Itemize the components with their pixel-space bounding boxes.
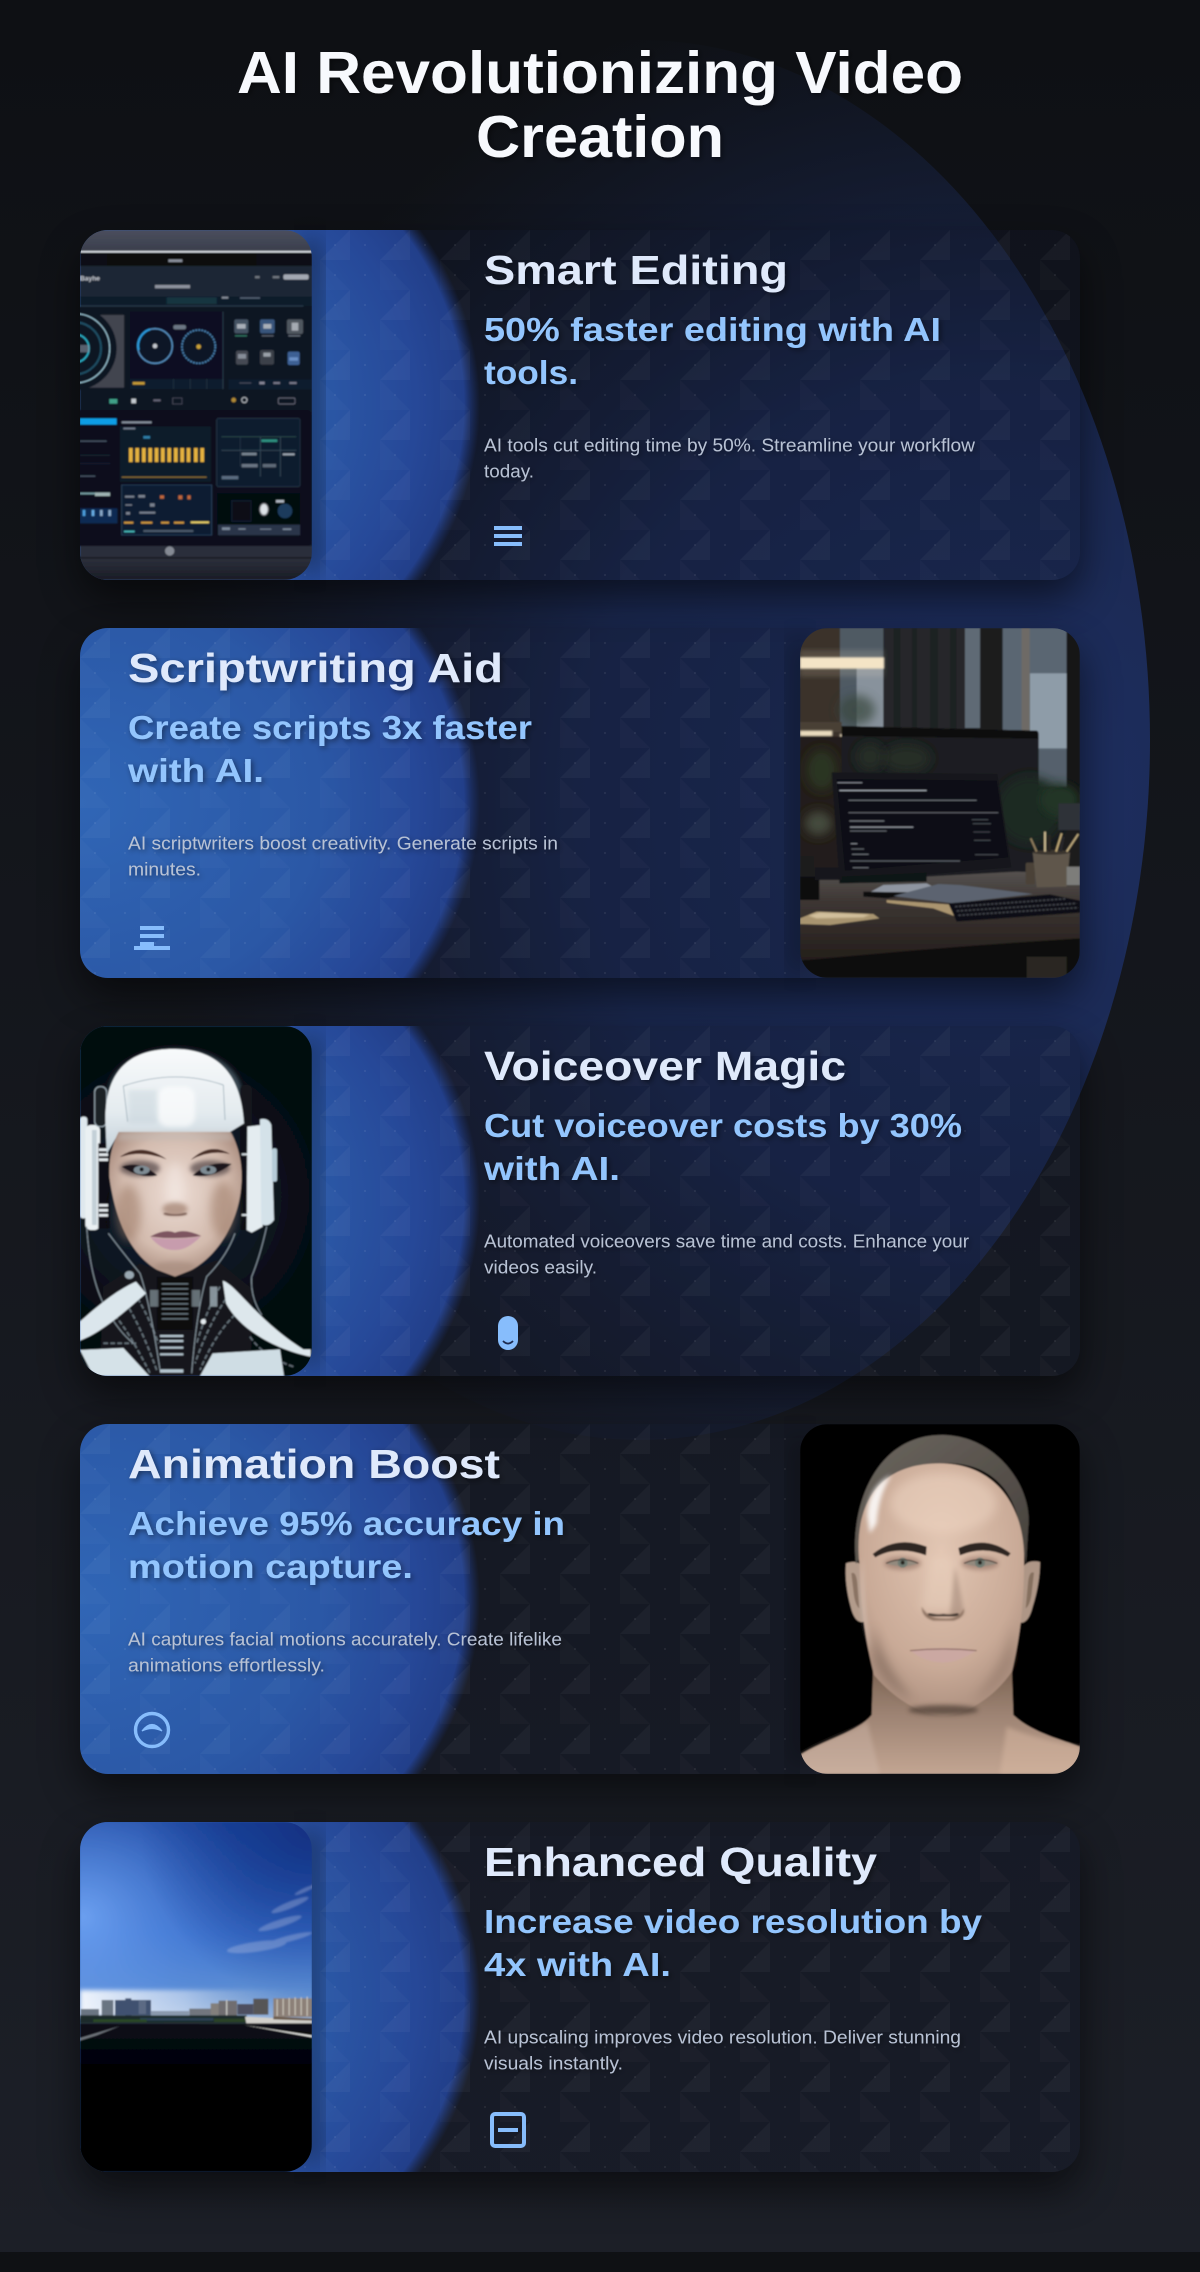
panel: Animation Boost	[80, 1424, 1080, 1792]
image: city skyline under blue sky	[80, 1822, 316, 2172]
icon: circled chevron	[136, 1714, 168, 1746]
description: videos easily.	[484, 1258, 597, 1278]
description	[484, 2028, 961, 2074]
description: AI upscaling improves video resolution. Deliver stunning	[484, 2028, 961, 2048]
panel: Scriptwriting Aid	[80, 628, 1080, 996]
description: visuals instantly.	[484, 2054, 623, 2074]
heading: Voiceover Magic	[484, 1043, 846, 1089]
stat subheading: with AI.	[127, 752, 264, 789]
title	[237, 40, 963, 170]
heading: Enhanced Quality	[484, 1839, 877, 1885]
panel: Enhanced Quality	[80, 1822, 1080, 2190]
icon: script lines	[134, 926, 170, 950]
stat subheading	[484, 311, 941, 391]
stat subheading	[484, 1903, 983, 1983]
stat subheading	[127, 709, 532, 789]
image: robot woman with headphones	[80, 1026, 312, 1376]
panel: Smart Editing	[33, 230, 1080, 598]
stat subheading	[128, 1505, 565, 1585]
image: dashboard monitor	[80, 230, 312, 580]
icon: boxed minus	[492, 2114, 524, 2146]
title: Creation	[476, 104, 724, 170]
stat subheading: Increase video resolution by	[484, 1903, 983, 1940]
stat subheading: tools.	[484, 354, 578, 391]
stat subheading: Cut voiceover costs by 30%	[484, 1107, 962, 1144]
description	[128, 1630, 562, 1676]
stat subheading: Create scripts 3x faster	[128, 709, 532, 746]
title: AI Revolutionizing Video	[237, 40, 963, 106]
heading: Animation Boost	[128, 1441, 500, 1487]
heading: Smart Editing	[484, 247, 788, 293]
background blue ellipse	[130, 40, 1150, 1440]
description: minutes.	[128, 860, 201, 880]
description	[128, 834, 558, 880]
image: dashboard monitor: Bayhe	[80, 276, 100, 283]
description: AI captures facial motions accurately. Create lifelike	[128, 1630, 562, 1650]
icon: hamburger lines	[494, 526, 522, 546]
description: today.	[484, 462, 534, 482]
heading: Scriptwriting Aid	[128, 645, 503, 691]
image: desk with monitor	[800, 628, 1080, 978]
stat subheading: Achieve 95% accuracy in	[128, 1505, 565, 1542]
stat subheading: 50% faster editing with AI	[484, 311, 941, 348]
stat subheading: with AI.	[483, 1150, 620, 1187]
stat subheading	[483, 1107, 962, 1187]
stat subheading: 4x with AI.	[484, 1946, 671, 1983]
icon: microphone	[498, 1316, 518, 1350]
description: animations effortlessly.	[128, 1656, 325, 1676]
description	[484, 1232, 969, 1278]
panel: Voiceover Magic	[80, 1026, 1080, 1394]
description	[484, 436, 976, 482]
description: AI scriptwriters boost creativity. Generate scripts in	[128, 834, 558, 854]
image: 3D male face	[800, 1424, 1080, 1774]
description: AI tools cut editing time by 50%. Streamline your workflow	[484, 436, 976, 456]
stat subheading: motion capture.	[128, 1548, 413, 1585]
description: Automated voiceovers save time and costs. Enhance your	[484, 1232, 969, 1252]
